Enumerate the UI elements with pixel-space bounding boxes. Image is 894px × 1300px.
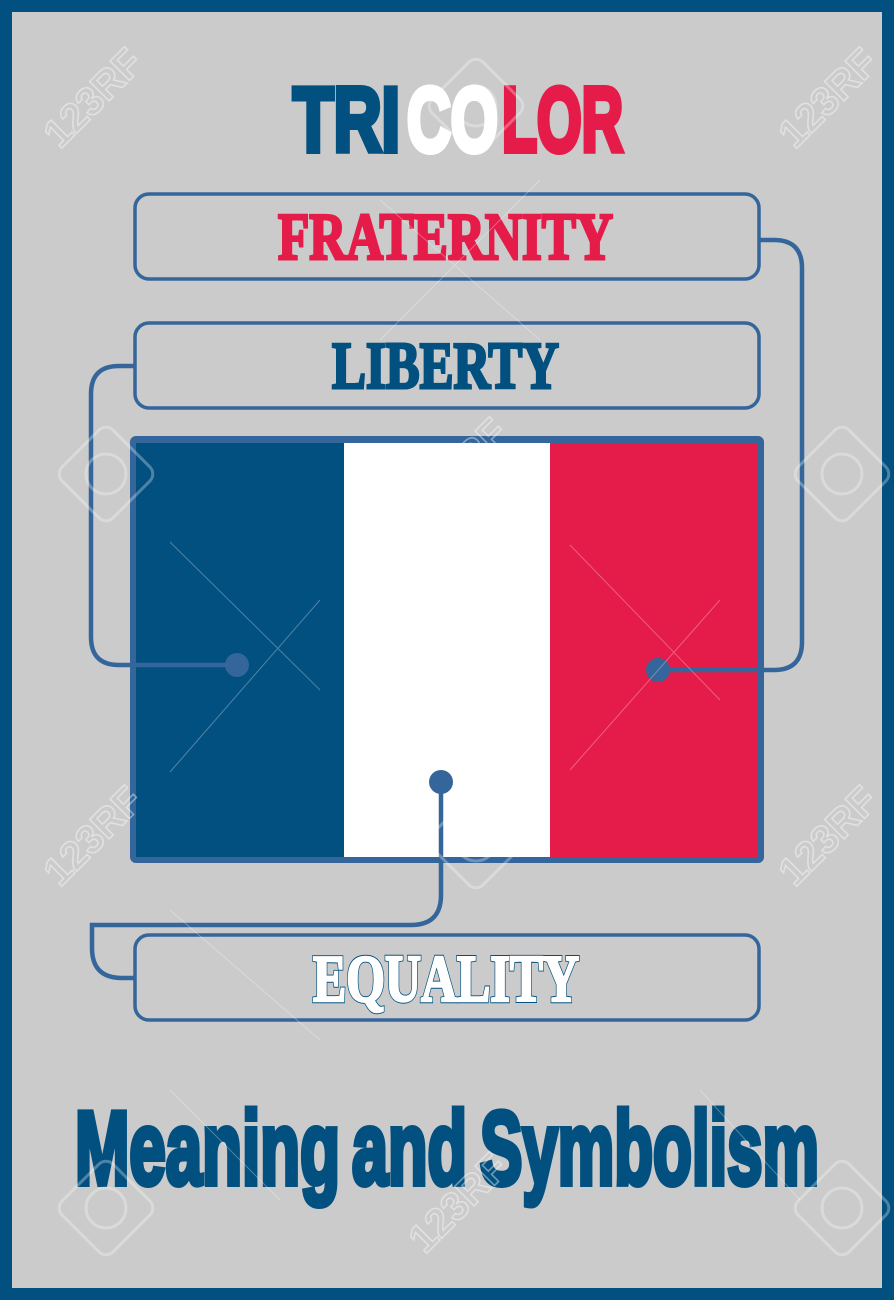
watermark text: 123RF [770, 40, 886, 156]
heading: Meaning and Symbolism: and [352, 1091, 467, 1207]
box: LIBERTY [135, 323, 759, 408]
title: TRICOLOR: CO [407, 70, 498, 171]
heading: Meaning and Symbolism: Meaning [75, 1091, 340, 1207]
title: TRICOLOR [293, 70, 623, 171]
box: FRATERNITY [135, 194, 759, 279]
box: EQUALITY [135, 935, 759, 1020]
connector: liberty to blue stripe [91, 366, 249, 677]
title: TRICOLOR: LOR [502, 70, 623, 171]
heading: Meaning and Symbolism [75, 1091, 819, 1207]
box: FRATERNITY: FRATERNITY [278, 200, 613, 274]
flag of France [133, 439, 761, 860]
watermark diagonal lines [170, 180, 800, 1200]
connector: equality to white stripe [92, 770, 453, 978]
box: EQUALITY: EQUALITY [313, 942, 579, 1016]
title: TRICOLOR: TRI [293, 70, 400, 171]
connector: fraternity to red stripe [646, 240, 802, 682]
watermark text: 123RF [770, 778, 886, 894]
box: LIBERTY: LIBERTY [332, 329, 559, 403]
watermark text: 123RF [400, 410, 516, 526]
watermark text: 123RF [400, 1145, 516, 1261]
watermark text: 123RF [35, 778, 151, 894]
watermark text: 123RF [35, 40, 151, 156]
box: EQUALITY: EQUALITY [313, 942, 579, 1016]
